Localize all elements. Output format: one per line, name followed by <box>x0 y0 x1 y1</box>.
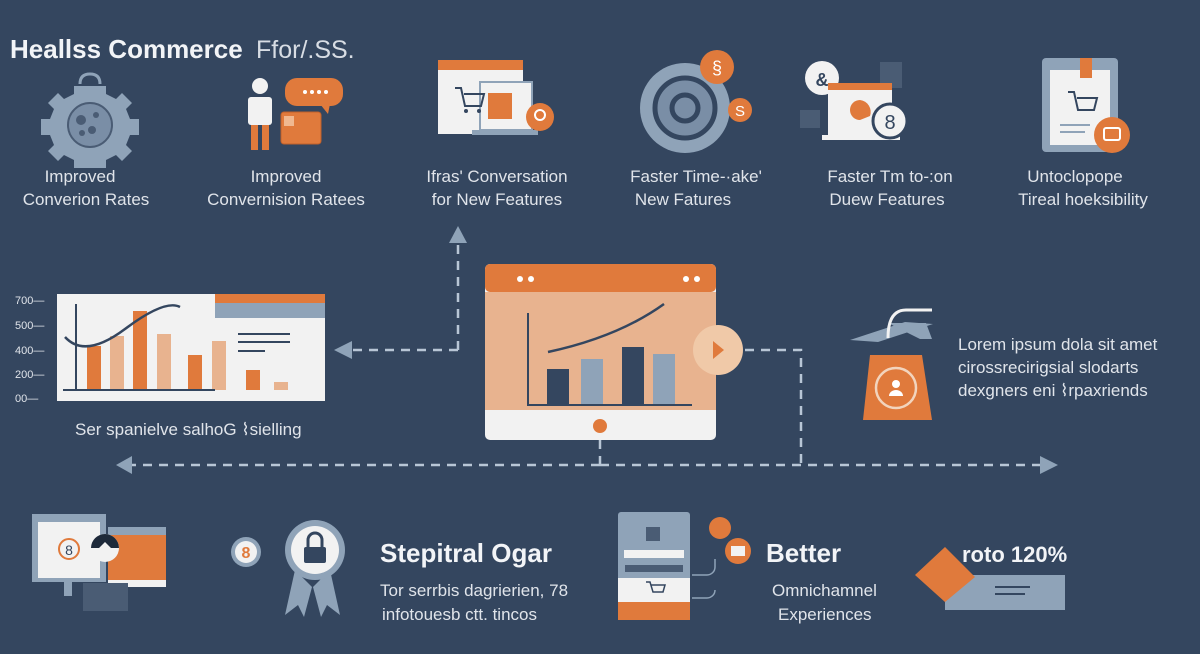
label: faster to-on: Faster Tm to-:on <box>827 167 953 186</box>
caption: left chart: Ser spanielve salhoG ⌇sielling <box>75 420 302 439</box>
y axis labels: 400— <box>15 345 44 357</box>
icon: clipboard cart <box>1042 58 1130 153</box>
arrows: dashed connectors <box>128 245 1040 465</box>
label: improved conversion rates 2 <box>207 167 365 209</box>
title: Heallss Commerce <box>10 34 243 64</box>
icon: gear target: § <box>712 58 722 78</box>
icon: browser cart <box>438 60 554 135</box>
text: lorem block: cirossrecirigsial slodarts <box>958 358 1138 377</box>
text: lorem block: Lorem ipsum dola sit amet <box>958 335 1158 354</box>
icon: triangle card <box>915 547 1065 610</box>
left chart panel <box>57 294 325 401</box>
label: faster time <box>630 167 762 209</box>
label: faster time: New Fatures <box>635 190 731 209</box>
heading: better: Better <box>766 538 841 568</box>
title <box>10 34 355 64</box>
text: omnichannel: Experiences <box>778 605 872 624</box>
text: stepitral description: infotouesb ctt. tincos <box>382 605 537 624</box>
y axis labels: 500— <box>15 320 44 332</box>
icon: gear target: S <box>735 103 745 120</box>
text: stepitral description: Tor serrbis dagrierien, 78 <box>380 581 568 600</box>
label: improved conversion rates 1: Improved <box>45 167 115 186</box>
heading: stepitral ogar: Stepitral Ogar <box>380 538 552 568</box>
center chart panel <box>485 264 716 440</box>
label: improved conversion rates 2: Convernision Ratees <box>207 190 365 209</box>
icon: monitor with person <box>32 514 166 611</box>
label: conversation features <box>426 167 568 209</box>
text: lorem block: dexgners eni ⌇rpaxriends <box>958 381 1148 400</box>
text: lorem block <box>958 335 1158 400</box>
label: faster time: Faster Time-·ake' <box>630 167 762 186</box>
icon: play button <box>693 325 743 375</box>
label: faster to-on <box>827 167 953 209</box>
text: omnichannel <box>772 581 877 624</box>
label: improved conversion rates 1 <box>23 167 149 209</box>
icon: lock badge <box>231 520 345 617</box>
label: accessibility: Tireal hoeksibility <box>1018 190 1148 209</box>
label: improved conversion rates 1: Converion Rates <box>23 190 149 209</box>
icon: laptop dashboard <box>800 61 907 140</box>
label: accessibility: Untoclopope <box>1027 167 1123 186</box>
y axis labels: 700— <box>15 295 44 307</box>
icon: phone <box>618 512 751 620</box>
text: omnichannel: Omnichamnel <box>772 581 877 600</box>
y axis labels <box>15 295 44 405</box>
heading: roto 120%: roto 120% <box>962 542 1067 567</box>
y axis labels: 200— <box>15 369 44 381</box>
icon: gear <box>41 74 139 168</box>
icon: shopping bag <box>850 310 933 420</box>
icon: laptop dashboard: 8 <box>884 112 896 134</box>
text: stepitral description <box>380 581 568 624</box>
y axis labels: 00— <box>15 393 38 405</box>
icon: gear target <box>640 50 752 153</box>
label: conversation features: Ifras' Conversation <box>426 167 568 186</box>
icon: person with chat <box>248 78 343 150</box>
label: conversation features: for New Features <box>432 190 562 209</box>
icon: monitor with person: 8 <box>65 542 73 558</box>
label: accessibility <box>1018 167 1148 209</box>
title: Ffor/.SS. <box>256 36 355 64</box>
icon: lock badge: 8 <box>242 545 251 562</box>
label: faster to-on: Duew Features <box>829 190 945 209</box>
label: improved conversion rates 2: Improved <box>251 167 321 186</box>
icon: laptop dashboard: & <box>816 70 828 90</box>
arrowheads <box>116 226 1058 474</box>
